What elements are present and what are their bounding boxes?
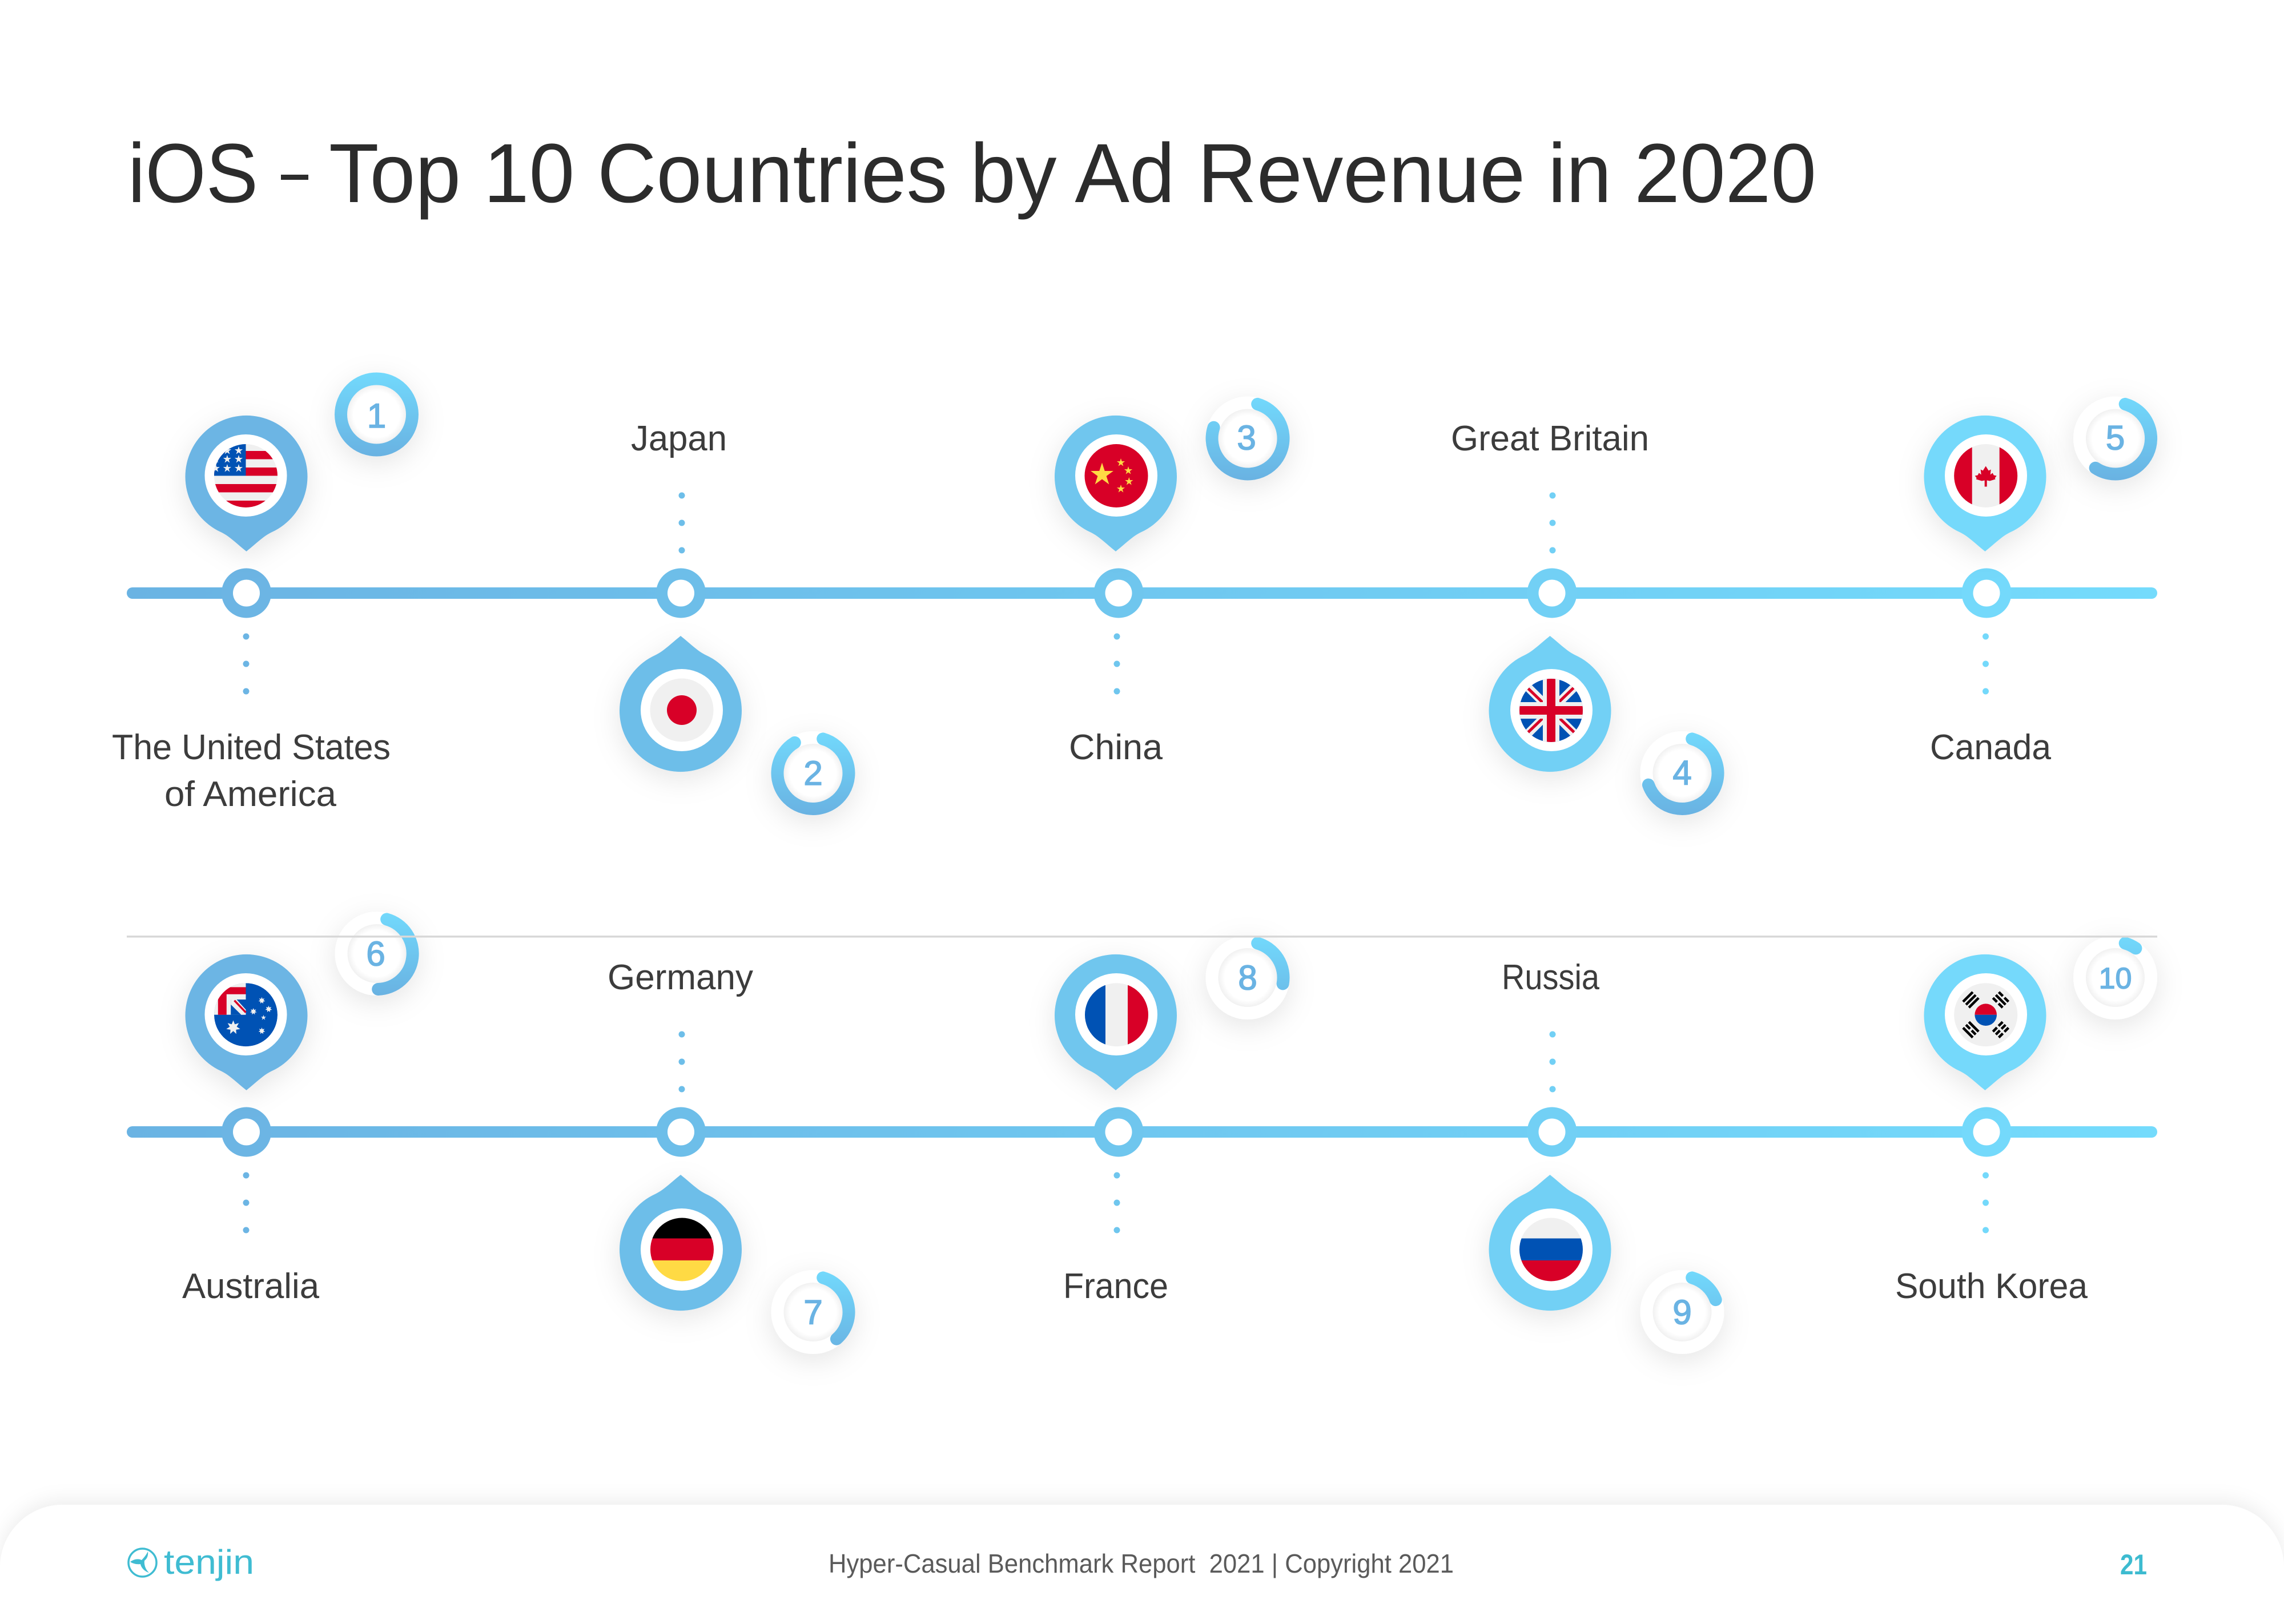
pin with Russia flag xyxy=(1489,1175,1611,1311)
footer panel xyxy=(0,1505,2284,1624)
pin with Australia flag xyxy=(185,954,307,1090)
pin with Germany flag xyxy=(620,1175,742,1311)
pin with China flag xyxy=(1055,416,1177,551)
rank badge 4: 4 xyxy=(1672,753,1692,792)
rank badge 5: 5 xyxy=(2106,419,2125,457)
country 10: South Korea xyxy=(1895,936,2157,1306)
rank badge 8: 8 xyxy=(1238,959,1257,997)
dotted connector xyxy=(678,492,685,554)
footer text: Hyper-Casual Benchmark Report 2021 | Copyright 2021 xyxy=(829,1549,1454,1578)
rank badge 7 xyxy=(771,1270,855,1354)
pin with UK flag xyxy=(1489,636,1611,772)
label: France xyxy=(1063,1267,1168,1306)
country 7: Germany xyxy=(608,958,855,1354)
label: Japan xyxy=(631,419,727,458)
dotted connector xyxy=(678,1031,685,1093)
pin with France flag xyxy=(1055,954,1177,1090)
country 2: Japan xyxy=(620,419,855,815)
rank badge 3: 3 xyxy=(1237,419,1256,457)
pin with South Korea flag xyxy=(1924,954,2046,1090)
country 4: Great Britain xyxy=(1451,419,1724,815)
node xyxy=(1527,1107,1577,1156)
node xyxy=(1094,1107,1143,1156)
rank badge 3 xyxy=(1206,396,1289,481)
label xyxy=(112,728,391,814)
country 6: Australia xyxy=(182,912,419,1306)
rank badge 2 xyxy=(771,731,855,815)
node xyxy=(656,569,706,618)
dotted connector xyxy=(1983,634,1989,694)
rank badge 5 xyxy=(2073,396,2157,481)
rank badge 4 xyxy=(1640,731,1724,815)
label: Australia xyxy=(182,1267,320,1306)
node xyxy=(1094,569,1143,618)
node xyxy=(656,1107,706,1156)
country 1: United States xyxy=(112,372,419,814)
rank badge 7: 7 xyxy=(803,1293,823,1331)
country 9: Russia xyxy=(1489,958,1724,1354)
label: China xyxy=(1069,728,1163,767)
node xyxy=(1962,569,2011,618)
label: Germany xyxy=(608,958,753,997)
rank badge 1: 1 xyxy=(367,397,386,435)
dotted connector xyxy=(243,1172,249,1233)
dotted connector xyxy=(1550,492,1555,554)
node xyxy=(1527,569,1577,618)
dotted connector xyxy=(1113,1172,1120,1233)
timeline row 2 xyxy=(127,912,2157,1354)
country 5: Canada xyxy=(1924,396,2157,767)
dotted connector xyxy=(1550,1031,1555,1093)
label: Russia xyxy=(1502,958,1599,997)
page number: 21 xyxy=(2120,1549,2147,1581)
tenjin logo xyxy=(128,1543,254,1581)
label: South Korea xyxy=(1895,1267,2088,1306)
tenjin logo: tenjin xyxy=(164,1543,254,1581)
rank badge 10 xyxy=(2073,936,2157,1019)
track line row 1 xyxy=(127,587,2157,599)
title: Top 10 Countries by Ad Revenue in 2020 xyxy=(329,127,1816,220)
rank badge 9: 9 xyxy=(1672,1293,1692,1331)
pin with Canada flag xyxy=(1924,416,2046,551)
rank badge 2: 2 xyxy=(803,754,823,792)
pin with US flag xyxy=(185,416,307,551)
label: The United States xyxy=(112,728,391,767)
label: Canada xyxy=(1930,728,2052,767)
timeline row 1 xyxy=(112,372,2157,815)
pin with Japan flag xyxy=(620,636,742,772)
country 3: China xyxy=(1055,396,1289,767)
label: of America xyxy=(164,775,337,814)
node xyxy=(1962,1107,2011,1156)
node xyxy=(222,569,271,618)
dotted connector xyxy=(1113,634,1120,694)
rank badge 8 xyxy=(1206,936,1289,1019)
rank badge 9 xyxy=(1640,1270,1724,1354)
rank badge 6 xyxy=(335,912,419,996)
track line row 2 xyxy=(127,1126,2157,1138)
dotted connector xyxy=(1983,1172,1989,1233)
rank badge 1 xyxy=(335,372,419,457)
country 8: France xyxy=(1055,936,1289,1306)
rank badge 6: 6 xyxy=(366,935,385,973)
rank badge 10: 10 xyxy=(2099,962,2132,996)
label: Great Britain xyxy=(1451,419,1649,458)
dotted connector xyxy=(243,634,249,694)
title: iOS xyxy=(128,127,258,220)
node xyxy=(222,1107,271,1156)
